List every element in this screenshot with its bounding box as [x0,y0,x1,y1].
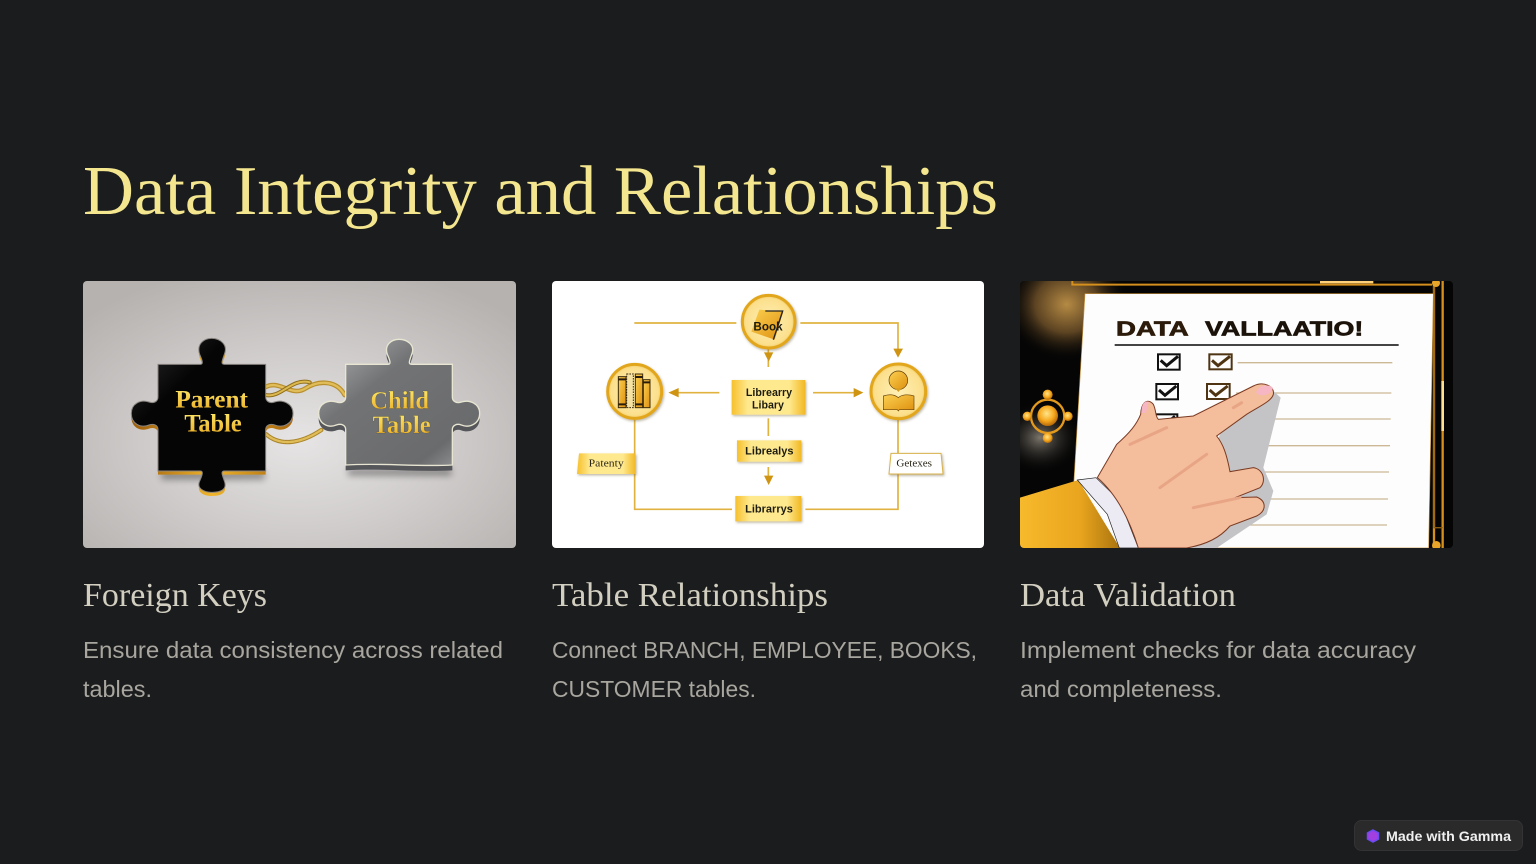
paper heading: DATA [1116,317,1189,340]
box: Librarrys [735,496,801,521]
body: foreign keys: tables. [83,676,152,702]
tag: Patenty [577,453,636,474]
puzzle piece: parent table [131,338,293,496]
tag: Patenty: Patenty [589,459,624,470]
tag: Getexes: Getexes [896,459,932,470]
puzzle piece: child table: Child [370,387,429,415]
paper heading: VALLAATIO! [1205,317,1363,340]
heading: foreign keys: Foreign Keys [83,577,267,614]
box: Librearry Libary [732,380,805,415]
tag: Getexes [889,453,943,474]
checklist rules [1232,363,1392,525]
gold chain links [266,382,345,442]
heading: data validation: Data Validation [1020,577,1236,614]
paper heading [1115,317,1399,345]
column 2 text: table relationships [552,577,977,702]
body: table relationships [552,637,977,702]
box: Librearry Libary: Libary [752,400,784,412]
box: Librealys [737,440,801,462]
body: data validation: and completeness. [1020,676,1222,702]
panel: table relationships diagram [552,281,984,548]
title: Data Integrity and Relationships [83,153,998,230]
box: Librearry Libary: Librearry [746,387,792,399]
hand shadow [1180,391,1281,548]
body: data validation: Implement checks for data accuracy [1020,637,1416,663]
puzzle piece: child table [319,339,480,476]
body: table relationships: CUSTOMER tables. [552,676,756,702]
gold frame [1072,279,1443,550]
connector lines [634,323,898,509]
made with gamma badge: Made with Gamma [1386,828,1511,844]
body: foreign keys [83,637,503,702]
checkboxes [1155,354,1232,430]
puzzle piece: parent table: Parent [175,386,249,414]
icon: gamma logo [1368,830,1378,842]
node: book: Book [753,321,783,334]
node: book [742,295,795,348]
checklist paper [1070,294,1433,548]
made with gamma badge [1354,820,1523,851]
panel: foreign keys image [83,281,516,548]
node: bookshelf [608,364,662,418]
box: Librarrys: Librarrys [745,503,793,515]
arrowheads [668,349,903,485]
gold ornament [1023,390,1073,443]
body: table relationships: Connect BRANCH, EMPLOYEE, BOOKS, [552,637,977,663]
node: reader [871,364,926,419]
column 3 text: data validation [1020,577,1416,702]
box: Librealys: Librealys [745,445,793,457]
body: foreign keys: Ensure data consistency across related [83,637,503,663]
puzzle piece: child table: Table [373,411,431,439]
column 1 text: foreign keys [83,577,503,702]
panel: data validation image [1020,281,1453,548]
heading: table relationships: Table Relationships [552,577,828,614]
puzzle piece: parent table: Table [184,410,242,438]
hand pointing [1097,384,1273,548]
body: data validation [1020,637,1416,702]
sleeve [1020,478,1138,548]
